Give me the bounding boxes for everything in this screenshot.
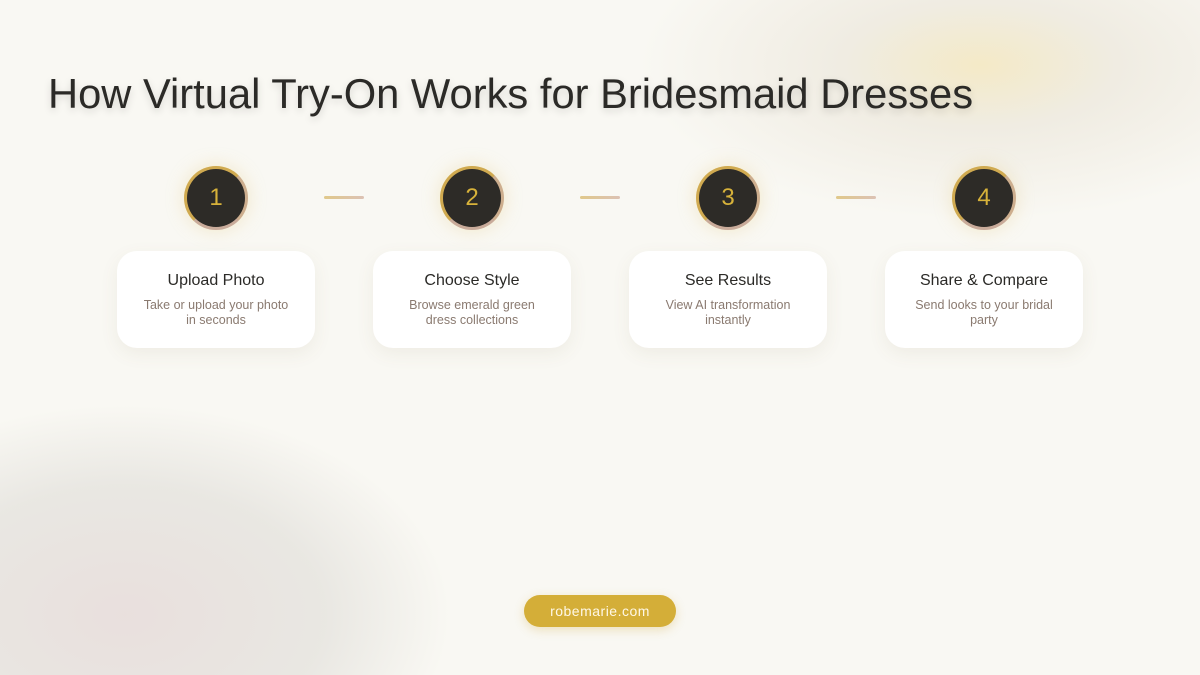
step 1 number <box>184 166 248 230</box>
connector 3 <box>836 196 876 199</box>
card: share & compare: party <box>970 313 998 327</box>
title: How Virtual Try-On Works for Bridesmaid Dresses <box>48 70 973 117</box>
footer pill: robemarie.com <box>550 603 650 619</box>
card: upload photo: in seconds <box>186 313 246 327</box>
connector 1 <box>324 196 364 199</box>
step 4 number <box>952 166 1016 230</box>
step 2 number <box>440 166 504 230</box>
step 2 number: 2 <box>465 184 479 211</box>
card: share & compare <box>885 251 1083 348</box>
card: share & compare: Send looks to your bridal <box>915 298 1053 312</box>
step 1 number: 1 <box>209 184 223 211</box>
card: upload photo: Take or upload your photo <box>144 298 288 312</box>
footer pill <box>524 595 676 627</box>
card: upload photo: Upload Photo <box>168 272 264 289</box>
card: see results <box>629 251 827 348</box>
step 3 number: 3 <box>721 184 735 211</box>
card: choose style: Choose Style <box>424 272 520 289</box>
card: choose style <box>373 251 571 348</box>
connector 2 <box>580 196 620 199</box>
step 3 number <box>696 166 760 230</box>
step 4 number: 4 <box>977 184 991 211</box>
card: choose style: Browse emerald green <box>409 298 535 312</box>
card: choose style: dress collections <box>426 313 518 327</box>
card: share & compare: Share & Compare <box>920 272 1048 289</box>
card: see results: View AI transformation <box>666 298 790 312</box>
card: see results: instantly <box>705 313 751 327</box>
card: upload photo <box>117 251 315 348</box>
card: see results: See Results <box>685 272 771 289</box>
